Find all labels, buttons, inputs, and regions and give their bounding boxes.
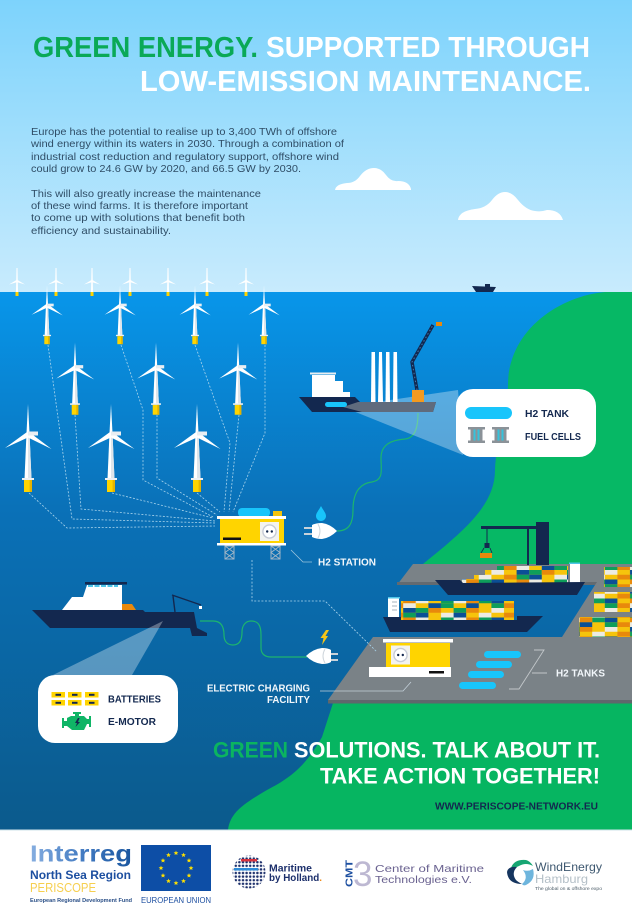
logo: Center of Maritime Technologies: Technologies e.V.	[375, 874, 472, 886]
callout: H2 tank and fuel cells: H2 TANK	[525, 409, 570, 420]
callout: batteries and e-motor: BATTERIES	[108, 694, 161, 706]
container ship upper	[435, 562, 585, 595]
stacked containers	[579, 567, 632, 637]
lower quay	[328, 637, 632, 704]
light beam to fuel cell callout	[343, 390, 463, 455]
logo: WindEnergy Hamburg: The global on & offshore expo	[535, 886, 603, 891]
logo: Interreg: North Sea Region	[30, 868, 131, 882]
callout: H2 tank and fuel cells: FUEL CELLS	[525, 432, 581, 443]
slogan: GREEN	[213, 738, 288, 762]
intro text: wind energy within its waters in 2030. Through a combination of	[30, 138, 344, 150]
slogan: SOLUTIONS. TALK ABOUT IT.	[294, 738, 600, 762]
distant turbines	[9, 268, 254, 296]
title	[33, 32, 591, 98]
crane ship	[299, 322, 442, 412]
intro text: of these wind farms. It is therefore important	[31, 200, 248, 212]
logo: Maritime by Holland	[232, 856, 322, 888]
dock crane	[480, 522, 549, 565]
intro text: could grow to 24.6 GW by 2020, and 66.5 GW by 2030.	[31, 163, 301, 175]
intro text	[30, 126, 344, 237]
H2 tanks label: H2 TANKS	[556, 668, 605, 680]
H2 station label	[291, 550, 376, 568]
logo: Center of Maritime Technologies: 3	[353, 855, 372, 894]
logo: European Union flag: EUROPEAN UNION	[141, 896, 211, 905]
logo: WindEnergy Hamburg: WindEnergy	[535, 860, 602, 874]
e-vessel	[32, 582, 207, 636]
H2 tanks	[459, 651, 521, 689]
website: WWW.PERISCOPE-NETWORK.EU	[435, 802, 598, 812]
cloud right	[458, 192, 563, 220]
logo: Interreg: PERISCOPE	[30, 880, 96, 895]
upper quay	[397, 564, 632, 637]
callout: H2 tank and fuel cells	[456, 389, 596, 457]
logo: Maritime by Holland: by Holland.	[269, 872, 322, 884]
intro text: industrial cost reduction and regulatory support, offshore wind	[31, 151, 339, 163]
cable links	[29, 345, 377, 652]
hydrogen cable	[337, 413, 418, 531]
H2 station	[217, 508, 286, 559]
lower land	[228, 703, 632, 830]
electric cable	[200, 621, 307, 657]
footer	[0, 830, 632, 920]
sea	[0, 292, 632, 830]
H2 station label: H2 STATION	[318, 558, 376, 568]
intro text: to come up with solutions that benefit both	[31, 212, 245, 224]
callout: batteries and e-motor: E-MOTOR	[108, 717, 157, 728]
logo: Center of Maritime Technologies: CMT	[344, 860, 356, 887]
light beam to e-vessel callout	[53, 621, 163, 675]
title: GREEN ENERGY.	[33, 32, 258, 64]
intro text: This will also greatly increase the maintenance	[31, 188, 261, 200]
callout: batteries and e-motor	[38, 675, 178, 743]
turbines row 2	[56, 343, 257, 415]
electric charging facility label	[207, 682, 411, 706]
logo: Center of Maritime Technologies	[344, 855, 484, 894]
logo: WindEnergy Hamburg: Hamburg	[535, 872, 588, 886]
logo: European Union flag	[141, 845, 211, 905]
turbines row 3	[5, 404, 220, 492]
cloud left	[335, 168, 411, 190]
distant ship	[472, 284, 496, 292]
electric plug	[306, 630, 338, 664]
logo: WindEnergy Hamburg	[507, 860, 603, 891]
charging facility	[369, 639, 453, 677]
sky	[0, 0, 632, 292]
slogan	[213, 738, 600, 788]
intro text: efficiency and sustainability.	[31, 225, 171, 237]
turbines row 1	[32, 285, 280, 344]
logo: Maritime by Holland: Maritime	[269, 862, 312, 874]
title: SUPPORTED THROUGH	[266, 32, 590, 64]
coast land	[423, 292, 632, 564]
logo: Interreg: European Regional Development Fund	[30, 898, 132, 904]
title: LOW-EMISSION MAINTENANCE.	[140, 66, 591, 98]
hydrogen plug	[304, 506, 337, 539]
logo: Interreg: Interreg	[30, 840, 132, 866]
intro text: Europe has the potential to realise up to 3,400 TWh of offshore	[31, 126, 337, 138]
electric charging facility label: ELECTRIC CHARGING	[207, 684, 310, 694]
H2 tanks label	[509, 650, 605, 689]
logo: Interreg	[30, 840, 132, 904]
container ship lower	[383, 597, 543, 632]
electric charging facility label: FACILITY	[267, 695, 310, 706]
slogan: TAKE ACTION TOGETHER!	[320, 764, 600, 788]
logo: Center of Maritime Technologies: Center of Maritime	[375, 863, 484, 875]
